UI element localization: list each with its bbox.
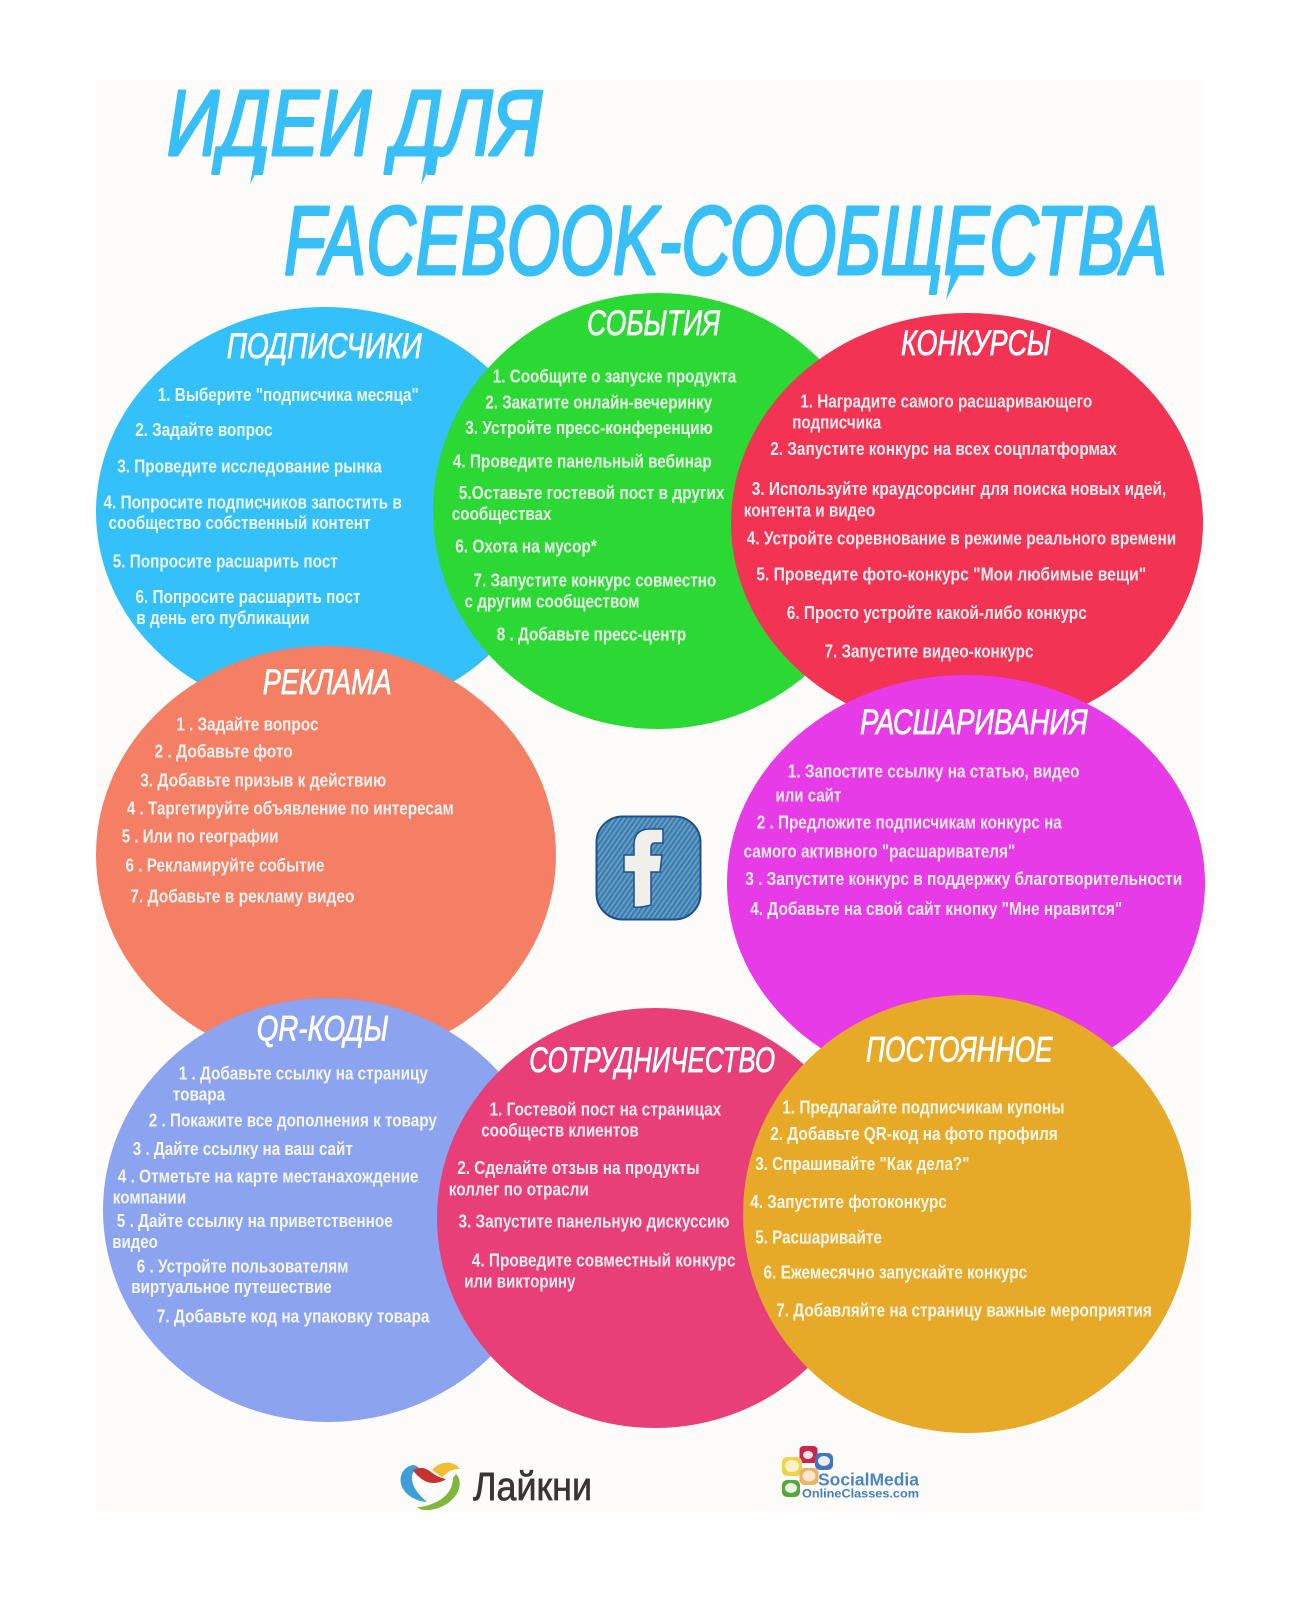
list: contests: 1. Наградите самого расшаривающего (800, 390, 1092, 411)
heading: QR codes: QR-КОДЫ (257, 1010, 388, 1049)
list: events: с другим сообществом (464, 590, 640, 611)
list: events: 4. Проведите панельный вебинар (453, 450, 712, 471)
list: sharing: 2 . Предложите подписчикам конкурс на (757, 811, 1062, 832)
list: permanent: 7. Добавляйте на страницу важные мероприятия (776, 1299, 1152, 1320)
list: contests: 4. Устройте соревнование в режиме реального времени (747, 527, 1176, 548)
list: contests: 2. Запустите конкурс на всех соцплатформах (770, 438, 1117, 459)
list: advertising: 1 . Задайте вопрос (176, 714, 318, 735)
list: sharing: 3 . Запустите конкурс в поддержку благотворительности (745, 868, 1182, 889)
list: events: 2. Закатите онлайн-вечеринку (485, 391, 713, 412)
list: QR codes: виртуальное путешествие (131, 1276, 332, 1297)
panel: events circle (433, 293, 883, 729)
title: ИДЕИ ДЛЯ (167, 71, 542, 175)
logo wordmark: SocialMedia (818, 1470, 919, 1490)
list: events (452, 365, 737, 645)
panel: advertising circle (96, 646, 556, 1064)
list: contests: подписчика (792, 411, 882, 432)
list: subscribers: сообщество собственный контент (108, 512, 370, 533)
list: events: сообществах (452, 503, 552, 524)
panel: cooperation circle (437, 1008, 873, 1428)
list: QR codes: 2 . Покажите все дополнения к товару (149, 1109, 437, 1130)
list: contests (744, 390, 1176, 661)
list: subscribers: 1. Выберите "подписчика месяца" (158, 384, 419, 405)
list: advertising (122, 714, 454, 906)
list: QR codes: 7. Добавьте код на упаковку товара (157, 1305, 430, 1326)
list: subscribers: 2. Задайте вопрос (135, 419, 272, 440)
list: subscribers: 4. Попросите подписчиков запостить в (104, 491, 402, 512)
list: cooperation: 1. Гостевой пост на страницах (490, 1099, 722, 1120)
list: QR codes: 6 . Устройте пользователям (137, 1255, 348, 1276)
list: cooperation: или викторину (464, 1270, 576, 1291)
list: contests: 3. Используйте краудсорсинг для поиска новых идей, (752, 478, 1166, 499)
list: cooperation (449, 1099, 736, 1291)
list: contests: 6. Просто устройте какой-либо конкурс (787, 602, 1087, 623)
icon: facebook logo (596, 816, 700, 920)
list: events: 5.Оставьте гостевой пост в других (459, 482, 725, 503)
heading: events: СОБЫТИЯ (587, 304, 720, 343)
list: QR codes: видео (112, 1231, 158, 1252)
list: QR codes: 3 . Дайте ссылку на ваш сайт (133, 1138, 353, 1159)
list: permanent (750, 1096, 1152, 1320)
list: sharing: или сайт (776, 784, 841, 805)
list: QR codes: 1 . Добавьте ссылку на страницу (179, 1063, 428, 1084)
list: contests: 5. Проведите фото-конкурс "Мои любимые вещи" (756, 564, 1146, 585)
list: advertising: 6 . Рекламируйте событие (126, 855, 324, 876)
list: QR codes: 4 . Отметьте на карте местанахождение (118, 1165, 419, 1186)
list: permanent: 2. Добавьте QR-код на фото профиля (770, 1123, 1058, 1144)
list: cooperation: коллег по отрасли (449, 1179, 589, 1200)
list: contests: контента и видео (744, 499, 875, 520)
heading: contests: КОНКУРСЫ (901, 324, 1051, 363)
logo: Лайкни (400, 1463, 592, 1510)
list: advertising: 5 . Или по географии (122, 825, 278, 846)
list: permanent: 1. Предлагайте подписчикам купоны (782, 1096, 1064, 1117)
list: subscribers: 6. Попросите расшарить пост (136, 586, 360, 607)
list: permanent: 3. Спрашивайте "Как дела?" (755, 1153, 970, 1174)
panel: permanent circle (743, 995, 1191, 1433)
panel: sharing circle (727, 675, 1205, 1091)
list: sharing (744, 760, 1182, 919)
list: sharing: 1. Запостите ссылку на статью, видео (788, 760, 1080, 781)
list: advertising: 2 . Добавьте фото (154, 740, 293, 761)
background panel (96, 80, 1204, 1512)
list: subscribers: 3. Проведите исследование рынка (117, 456, 382, 477)
list: subscribers: 5. Попросите расшарить пост (113, 550, 338, 571)
list: events: 6. Охота на мусор* (455, 535, 597, 556)
heading: permanent: ПОСТОЯННОЕ (866, 1031, 1053, 1070)
list: contests: 7. Запустите видео-конкурс (824, 640, 1034, 661)
list: events: 8 . Добавьте пресс-центр (497, 624, 686, 645)
list: subscribers (104, 384, 419, 628)
list: events: 3. Устройте пресс-конференцию (465, 417, 713, 438)
heading: cooperation: СОТРУДНИЧЕСТВО (529, 1041, 775, 1080)
panel: contests circle (731, 313, 1203, 733)
list: permanent: 6. Ежемесячно запускайте конкурс (764, 1261, 1027, 1282)
list: QR codes: компании (113, 1186, 186, 1207)
list: advertising: 3. Добавьте призыв к действию (140, 769, 386, 790)
list: permanent: 5. Расшаривайте (755, 1226, 882, 1247)
list: cooperation: 2. Сделайте отзыв на продукты (457, 1157, 700, 1178)
list: QR codes: товара (173, 1084, 226, 1105)
list: permanent: 4. Запустите фотоконкурс (750, 1191, 947, 1212)
logo: SocialMediaOnlineClasses: OnlineClasses.com (802, 1486, 919, 1500)
list: advertising: 4 . Таргетируйте объявление по интересам (127, 797, 454, 818)
list: cooperation: 4. Проведите совместный конкурс (472, 1249, 736, 1270)
list: subscribers: в день его публикации (136, 607, 310, 628)
panel: QR codes circle (103, 998, 553, 1422)
list: events: 1. Сообщите о запуске продукта (493, 365, 737, 386)
heading: sharing: РАСШАРИВАНИЯ (860, 703, 1088, 742)
panel: subscribers circle (96, 307, 554, 717)
heading: subscribers: ПОДПИСЧИКИ (227, 327, 422, 366)
list: QR codes (112, 1063, 437, 1326)
list: cooperation: 3. Запустите панельную дискуссию (458, 1210, 730, 1231)
list: sharing: 4. Добавьте на свой сайт кнопку "Мне нравится" (750, 898, 1122, 919)
list: sharing: самого активного "расшаривателя" (744, 840, 1015, 861)
logo: SocialMediaOnlineClasses (782, 1446, 919, 1500)
list: cooperation: сообществ клиентов (481, 1119, 639, 1140)
list: events: 7. Запустите конкурс совместно (474, 569, 716, 590)
heading: advertising: РЕКЛАМА (263, 663, 392, 702)
title (167, 71, 1167, 300)
list: advertising: 7. Добавьте в рекламу видео (130, 885, 354, 906)
list: QR codes: 5 . Дайте ссылку на приветственное (117, 1210, 393, 1231)
logo wordmark: Лайкни (473, 1465, 592, 1509)
